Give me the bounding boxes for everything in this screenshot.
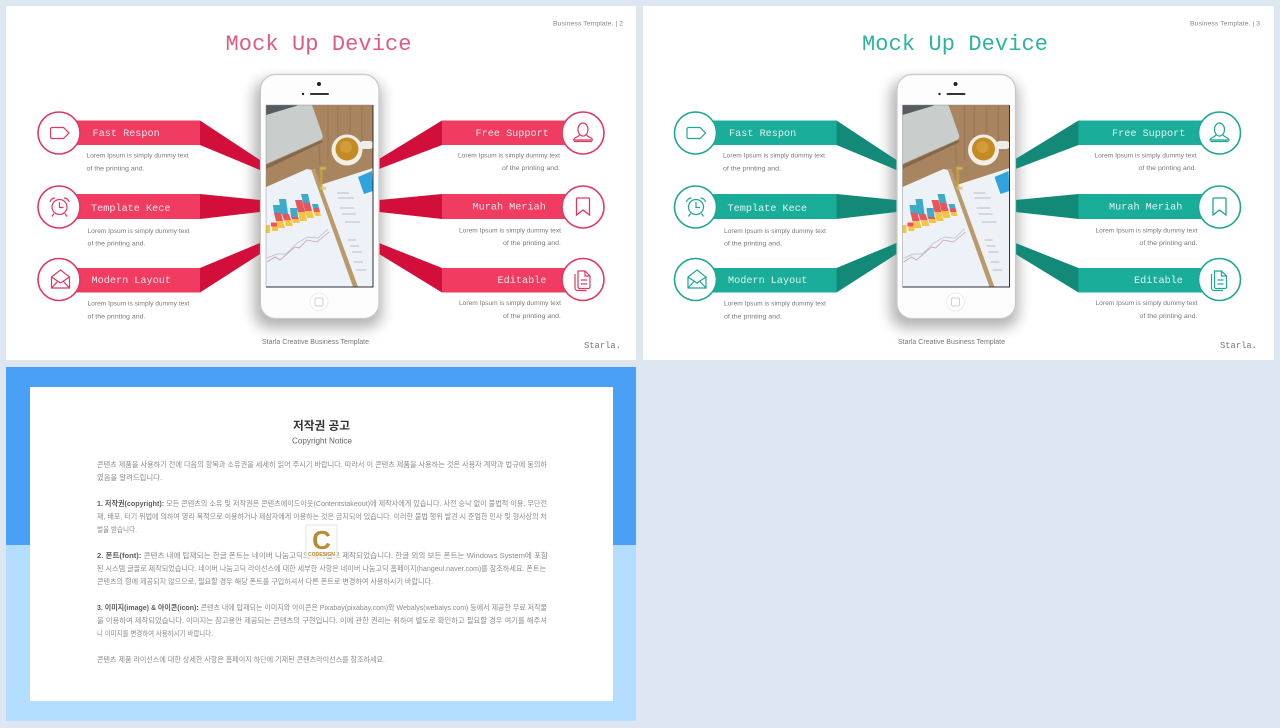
item: template kece: Lorem Ipsum is simply dummy text bbox=[724, 228, 826, 235]
caption: Starla Creative Business Template bbox=[262, 339, 369, 346]
item: modern layout: Lorem Ipsum is simply dummy text bbox=[88, 300, 190, 308]
connector: murah meriah bbox=[1016, 194, 1078, 219]
section 2: font: 2. 폰트(font): 콘텐츠 내에 탑재되는 한글 폰트는 네이버 나눔고딕의 저작물로 제작되었습니다. 한글 외의 보든 폰트는 Windows System에 포함 bbox=[97, 551, 548, 560]
connector: editable bbox=[1016, 243, 1078, 292]
item: modern layout: Modern Layout bbox=[92, 275, 171, 287]
item: editable: of the printing and. bbox=[503, 313, 561, 320]
section 3: image and icon: 니 이미지를 변경하여 사용하시기 바랍니다. bbox=[97, 629, 213, 638]
panel: teal slide bbox=[643, 6, 1274, 360]
panel: copyright notice slide bbox=[6, 367, 636, 721]
item: murah meriah: Lorem Ipsum is simply dummy text bbox=[1096, 228, 1198, 234]
watermark logo: C bbox=[312, 525, 331, 555]
item: fast respon bbox=[674, 112, 836, 172]
brand mark: Starla. bbox=[584, 341, 621, 351]
connector: template kece bbox=[836, 194, 896, 219]
intro paragraph: 였음을 알려드립니다. bbox=[97, 473, 162, 482]
teal slide content bbox=[674, 74, 1240, 328]
item: template kece: Template Kece bbox=[728, 203, 807, 215]
item: editable: Lorem Ipsum is simply dummy text bbox=[459, 300, 561, 307]
page header: Business Template. | 3 bbox=[1190, 20, 1260, 28]
item: free support: Lorem Ipsum is simply dummy text bbox=[458, 152, 560, 160]
item: murah meriah: Lorem Ipsum is simply dummy text bbox=[459, 228, 561, 234]
item: editable: Lorem Ipsum is simply dummy text bbox=[1096, 300, 1198, 307]
item: free support: of the printing and. bbox=[1138, 165, 1197, 172]
item: free support: of the printing and. bbox=[502, 165, 560, 172]
section 2: font: 콘텐츠의 형에 제공되지 않으므로, 필요할 경우 해당 폰트를 구입하셔서 다른 폰트로 변경하여 사용하시기 바랍니다. bbox=[97, 577, 433, 586]
item: editable bbox=[1078, 258, 1240, 320]
connector: free support bbox=[1016, 120, 1078, 169]
item: template kece: Lorem Ipsum is simply dummy text bbox=[88, 228, 190, 235]
item: editable bbox=[442, 258, 604, 320]
connector: fast respon bbox=[200, 120, 260, 170]
caption: Starla Creative Business Template bbox=[898, 339, 1005, 346]
section 3: image and icon: 을 이용하여 제작되었습니다. 이미지는 참고용만 제공되는 콘텐츠의 구현입니다. 이에 관한 권리는 위하여 별도로 확인하고 필요할 경우 여기를 해주셔 bbox=[97, 616, 547, 625]
connector: modern layout bbox=[200, 243, 260, 292]
phone mockup bbox=[897, 74, 1016, 318]
connector: murah meriah bbox=[379, 194, 442, 219]
item: editable: Editable bbox=[1134, 275, 1183, 287]
item: fast respon: of the printing and. bbox=[723, 166, 781, 172]
item: modern layout bbox=[674, 258, 836, 320]
section 1: copyright: 1. 저작권(copyright): 모든 콘텐츠의 소유 및 저작권은 콘텐츠에이드아웃(Contentstakeout)에 제작사에게 있습니다. 사전 승낙 없이 불법적 이용, 무단전 bbox=[97, 499, 547, 508]
watermark logo: CODESIGN bbox=[308, 552, 335, 558]
panel: pink slide bbox=[6, 6, 636, 360]
item: murah meriah: of the printing and. bbox=[503, 240, 561, 247]
item: fast respon bbox=[38, 112, 200, 172]
item: free support: Free Support bbox=[1112, 129, 1185, 140]
phone shadow bbox=[254, 80, 382, 328]
connector: fast respon bbox=[836, 120, 896, 170]
connector: modern layout bbox=[836, 243, 896, 292]
item: modern layout: Lorem Ipsum is simply dummy text bbox=[724, 300, 826, 308]
connector: editable bbox=[379, 243, 442, 292]
item: editable: Editable bbox=[498, 275, 546, 287]
connector: template kece bbox=[200, 194, 260, 219]
item: fast respon: Fast Respon bbox=[92, 129, 160, 140]
phone shadow bbox=[890, 80, 1018, 328]
intro paragraph bbox=[97, 460, 547, 482]
section 2: font: 된 시스템 글꼴로 제작되었습니다. 네이버 나눔고딕 라이선스에 대한 세부한 사항은 네이버 나눔고딕 홈페이지(hangeul.naver.com)를 참조하세요. 폰트는 bbox=[97, 564, 546, 573]
item: free support: Lorem Ipsum is simply dummy text bbox=[1094, 152, 1197, 160]
page header: Business Template. | 2 bbox=[553, 20, 623, 28]
item: template kece: of the printing and. bbox=[724, 240, 782, 248]
item: murah meriah bbox=[1078, 186, 1240, 247]
section 1: copyright: 벌을 받습니다. bbox=[97, 525, 137, 534]
item: template kece bbox=[674, 186, 836, 248]
item: template kece: Template Kece bbox=[91, 203, 170, 215]
item: modern layout: Modern Layout bbox=[728, 275, 807, 287]
notice title: 저작권 공고 bbox=[293, 418, 350, 432]
intro paragraph: 콘텐츠 제품을 사용하기 전에 다음의 항목과 소유권을 세세히 읽어 주시기 바랍니다. 따라서 이 콘텐츠 제품을 사용하는 것은 사용자 계약과 법규에 동의하 bbox=[97, 460, 547, 469]
title: Mock Up Device bbox=[862, 32, 1048, 57]
section 1: copyright bbox=[97, 499, 547, 534]
item: murah meriah: Murah Meriah bbox=[472, 202, 546, 214]
notice subtitle: Copyright Notice bbox=[292, 436, 352, 446]
item: template kece bbox=[38, 186, 200, 248]
item: free support: Free Support bbox=[476, 129, 549, 140]
item: murah meriah bbox=[442, 186, 604, 247]
item: modern layout: of the printing and. bbox=[88, 314, 146, 320]
connector: free support bbox=[379, 120, 442, 169]
item: editable: of the printing and. bbox=[1140, 313, 1198, 320]
closing note: 콘텐츠 제품 라이선스에 대한 상세한 사항은 홈페이지 하단에 기재된 콘텐츠라이선스를 참조하세요. bbox=[97, 655, 385, 664]
title: Mock Up Device bbox=[226, 32, 412, 57]
item: fast respon: Lorem Ipsum is simply dummy text bbox=[723, 152, 825, 160]
brand mark: Starla. bbox=[1220, 341, 1257, 351]
phone mockup bbox=[260, 74, 379, 318]
item: fast respon: Lorem Ipsum is simply dummy text bbox=[86, 152, 189, 160]
item: free support bbox=[442, 112, 604, 172]
item: fast respon: of the printing and. bbox=[86, 166, 145, 172]
section 2: font bbox=[97, 551, 548, 586]
item: modern layout: of the printing and. bbox=[724, 314, 782, 320]
section 3: image and icon bbox=[97, 603, 547, 638]
item: fast respon: Fast Respon bbox=[729, 129, 796, 140]
watermark logo bbox=[306, 525, 337, 558]
item: template kece: of the printing and. bbox=[88, 240, 146, 248]
section 1: copyright: 재, 배포, 타기 위법에 의하여 영리 목적으로 이용하거나 제삼자에게 이용하는 것은 금지되어 있습니다. 이러한 불법 행위 발견 시 준엄한 민사 및 형사상의 처 bbox=[97, 512, 547, 521]
item: murah meriah: Murah Meriah bbox=[1109, 202, 1182, 214]
item: modern layout bbox=[38, 258, 200, 320]
section 3: image and icon: 3. 이미지(image) & 아이콘(icon): 콘텐츠 내에 탑재되는 이미지와 아이콘은 Pixabay(pixabay.com)와 Webalys(webalys.com) 등에서 제공한 무료 저작물 bbox=[97, 603, 547, 612]
item: murah meriah: of the printing and. bbox=[1140, 240, 1198, 247]
item: free support bbox=[1078, 112, 1240, 172]
